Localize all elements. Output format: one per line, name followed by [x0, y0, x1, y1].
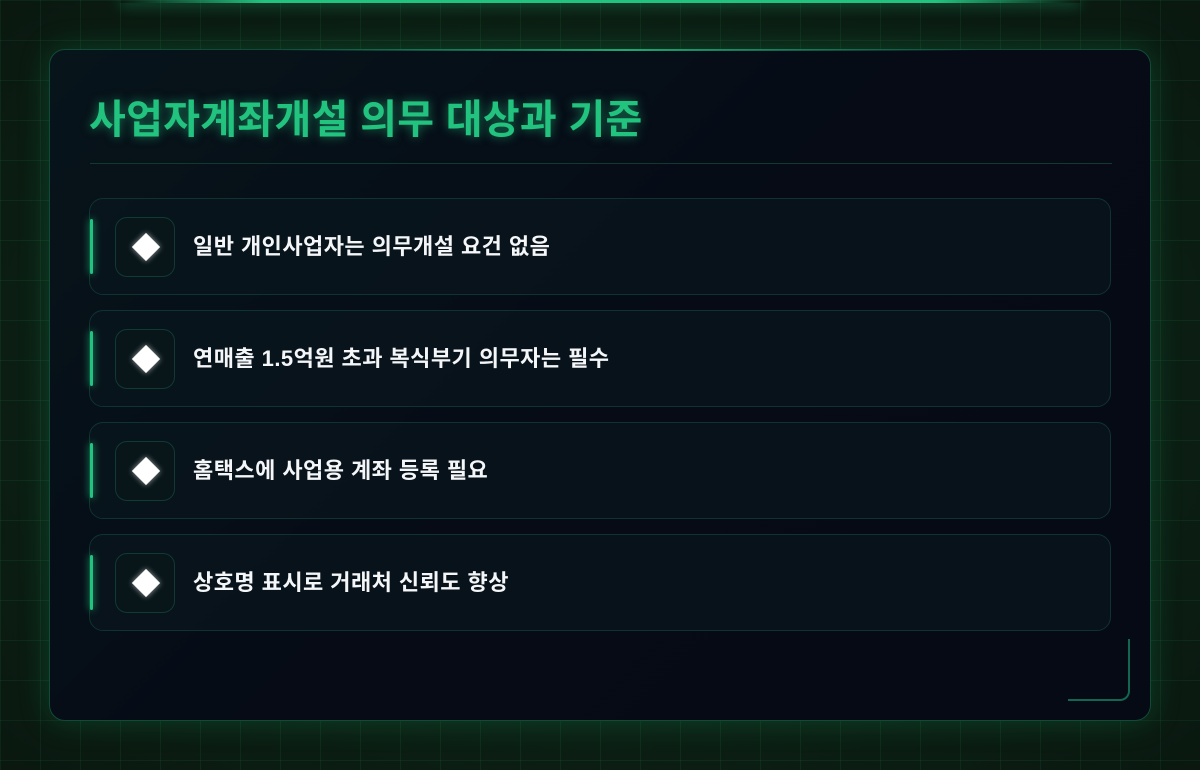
decorative corner bracket [1068, 639, 1130, 701]
text: 홈택스에 사업용 계좌 등록 필요 [193, 458, 488, 483]
icon: diamond [115, 329, 175, 389]
item 4 [89, 534, 1111, 631]
text: 연매출 1.5억원 초과 복식부기 의무자는 필수 [193, 346, 609, 371]
item 3 [89, 422, 1111, 519]
item 2 [89, 310, 1111, 407]
item 1 [89, 198, 1111, 295]
text: 일반 개인사업자는 의무개설 요건 없음 [193, 234, 550, 259]
icon: diamond [115, 553, 175, 613]
icon: diamond [115, 217, 175, 277]
icon: diamond [115, 441, 175, 501]
title: 사업자계좌개설 의무 대상과 기준 [89, 98, 643, 142]
text: 상호명 표시로 거래처 신뢰도 향상 [193, 570, 509, 595]
